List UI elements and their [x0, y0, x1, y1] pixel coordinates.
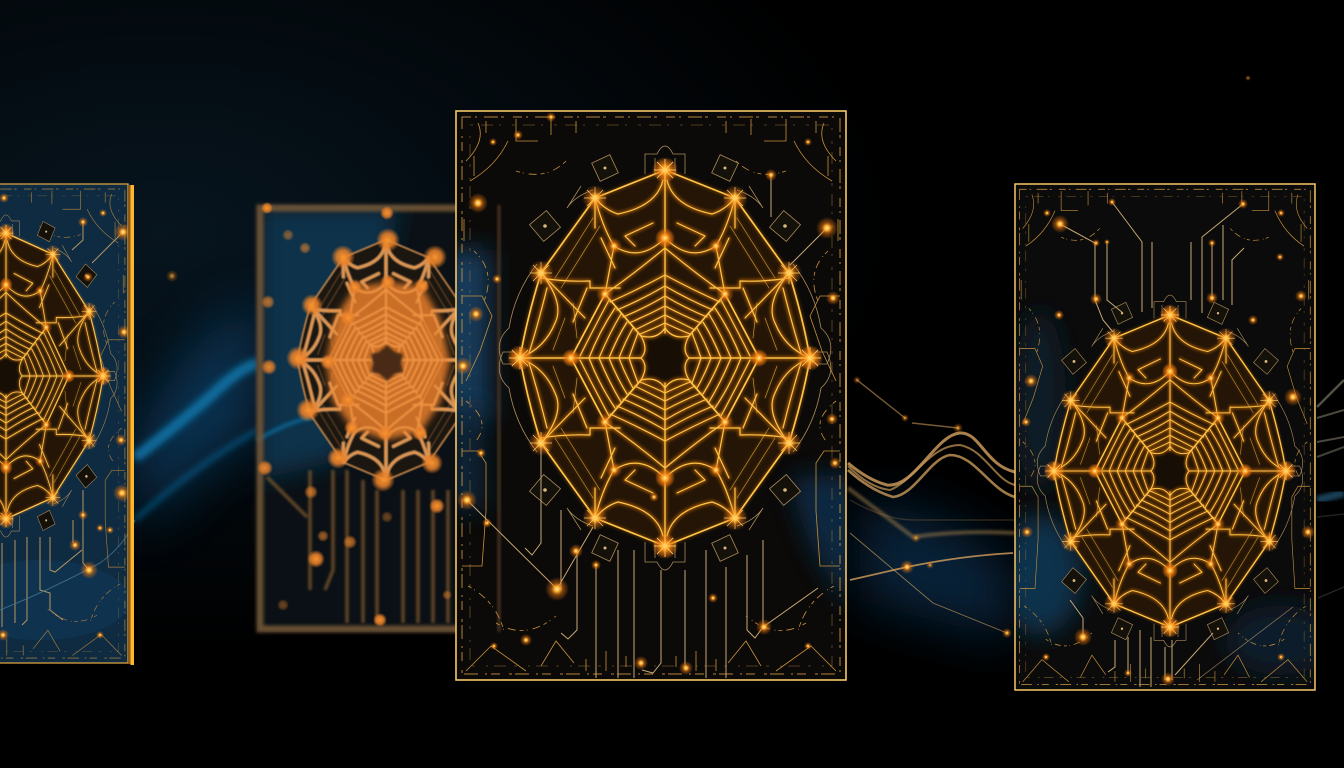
central panel border	[456, 111, 846, 680]
central web fill	[520, 170, 810, 546]
stray particles	[166, 75, 1251, 282]
blurred web centre star	[371, 345, 403, 381]
panel: left cropped circuit web	[0, 184, 135, 665]
right circuit traces	[1060, 202, 1293, 687]
left web glow	[0, 233, 103, 519]
far right wave streaks	[1317, 380, 1344, 598]
right web glow	[1054, 315, 1286, 627]
left circuit traces	[2, 222, 123, 627]
right web fill	[1054, 315, 1286, 627]
right web nodes	[1044, 304, 1296, 638]
blurred web dark backing	[298, 240, 474, 480]
blurred glowing dots	[257, 202, 452, 627]
left web lines	[0, 233, 103, 519]
central web outer ornaments	[499, 146, 831, 570]
blurred web orange core	[326, 282, 450, 440]
blurred web outer strands	[298, 240, 474, 480]
flowing connector lines	[848, 380, 1015, 633]
blurred circuit traces	[267, 470, 448, 623]
central circuit traces	[467, 175, 827, 678]
blurred web nodes	[286, 228, 447, 492]
right panel border	[1015, 184, 1315, 690]
panel: right circuit web	[1014, 183, 1316, 691]
left web fill	[0, 233, 103, 519]
panel: blurred rear circuit web	[254, 202, 456, 635]
right glowing dots	[1021, 198, 1315, 686]
right web lines	[1054, 315, 1286, 627]
blue light waves	[135, 300, 1015, 640]
see-through rear panel strip	[440, 205, 860, 632]
right web outer ornaments	[1037, 295, 1303, 647]
central web glow	[520, 170, 810, 546]
left web nodes	[0, 223, 112, 529]
left panel double edge	[0, 184, 134, 665]
panel: central circuit web	[440, 111, 860, 680]
left wave streaks	[135, 363, 258, 520]
left web outer ornaments	[0, 215, 117, 537]
connector nodes	[853, 376, 1012, 638]
left glowing dots	[0, 193, 132, 641]
central web nodes	[507, 157, 823, 559]
central web lines	[520, 170, 810, 546]
central glowing dots	[454, 112, 841, 675]
right panel blue haze	[998, 310, 1335, 675]
blurred web core strands	[298, 240, 474, 480]
left faint blue wave	[0, 520, 135, 610]
